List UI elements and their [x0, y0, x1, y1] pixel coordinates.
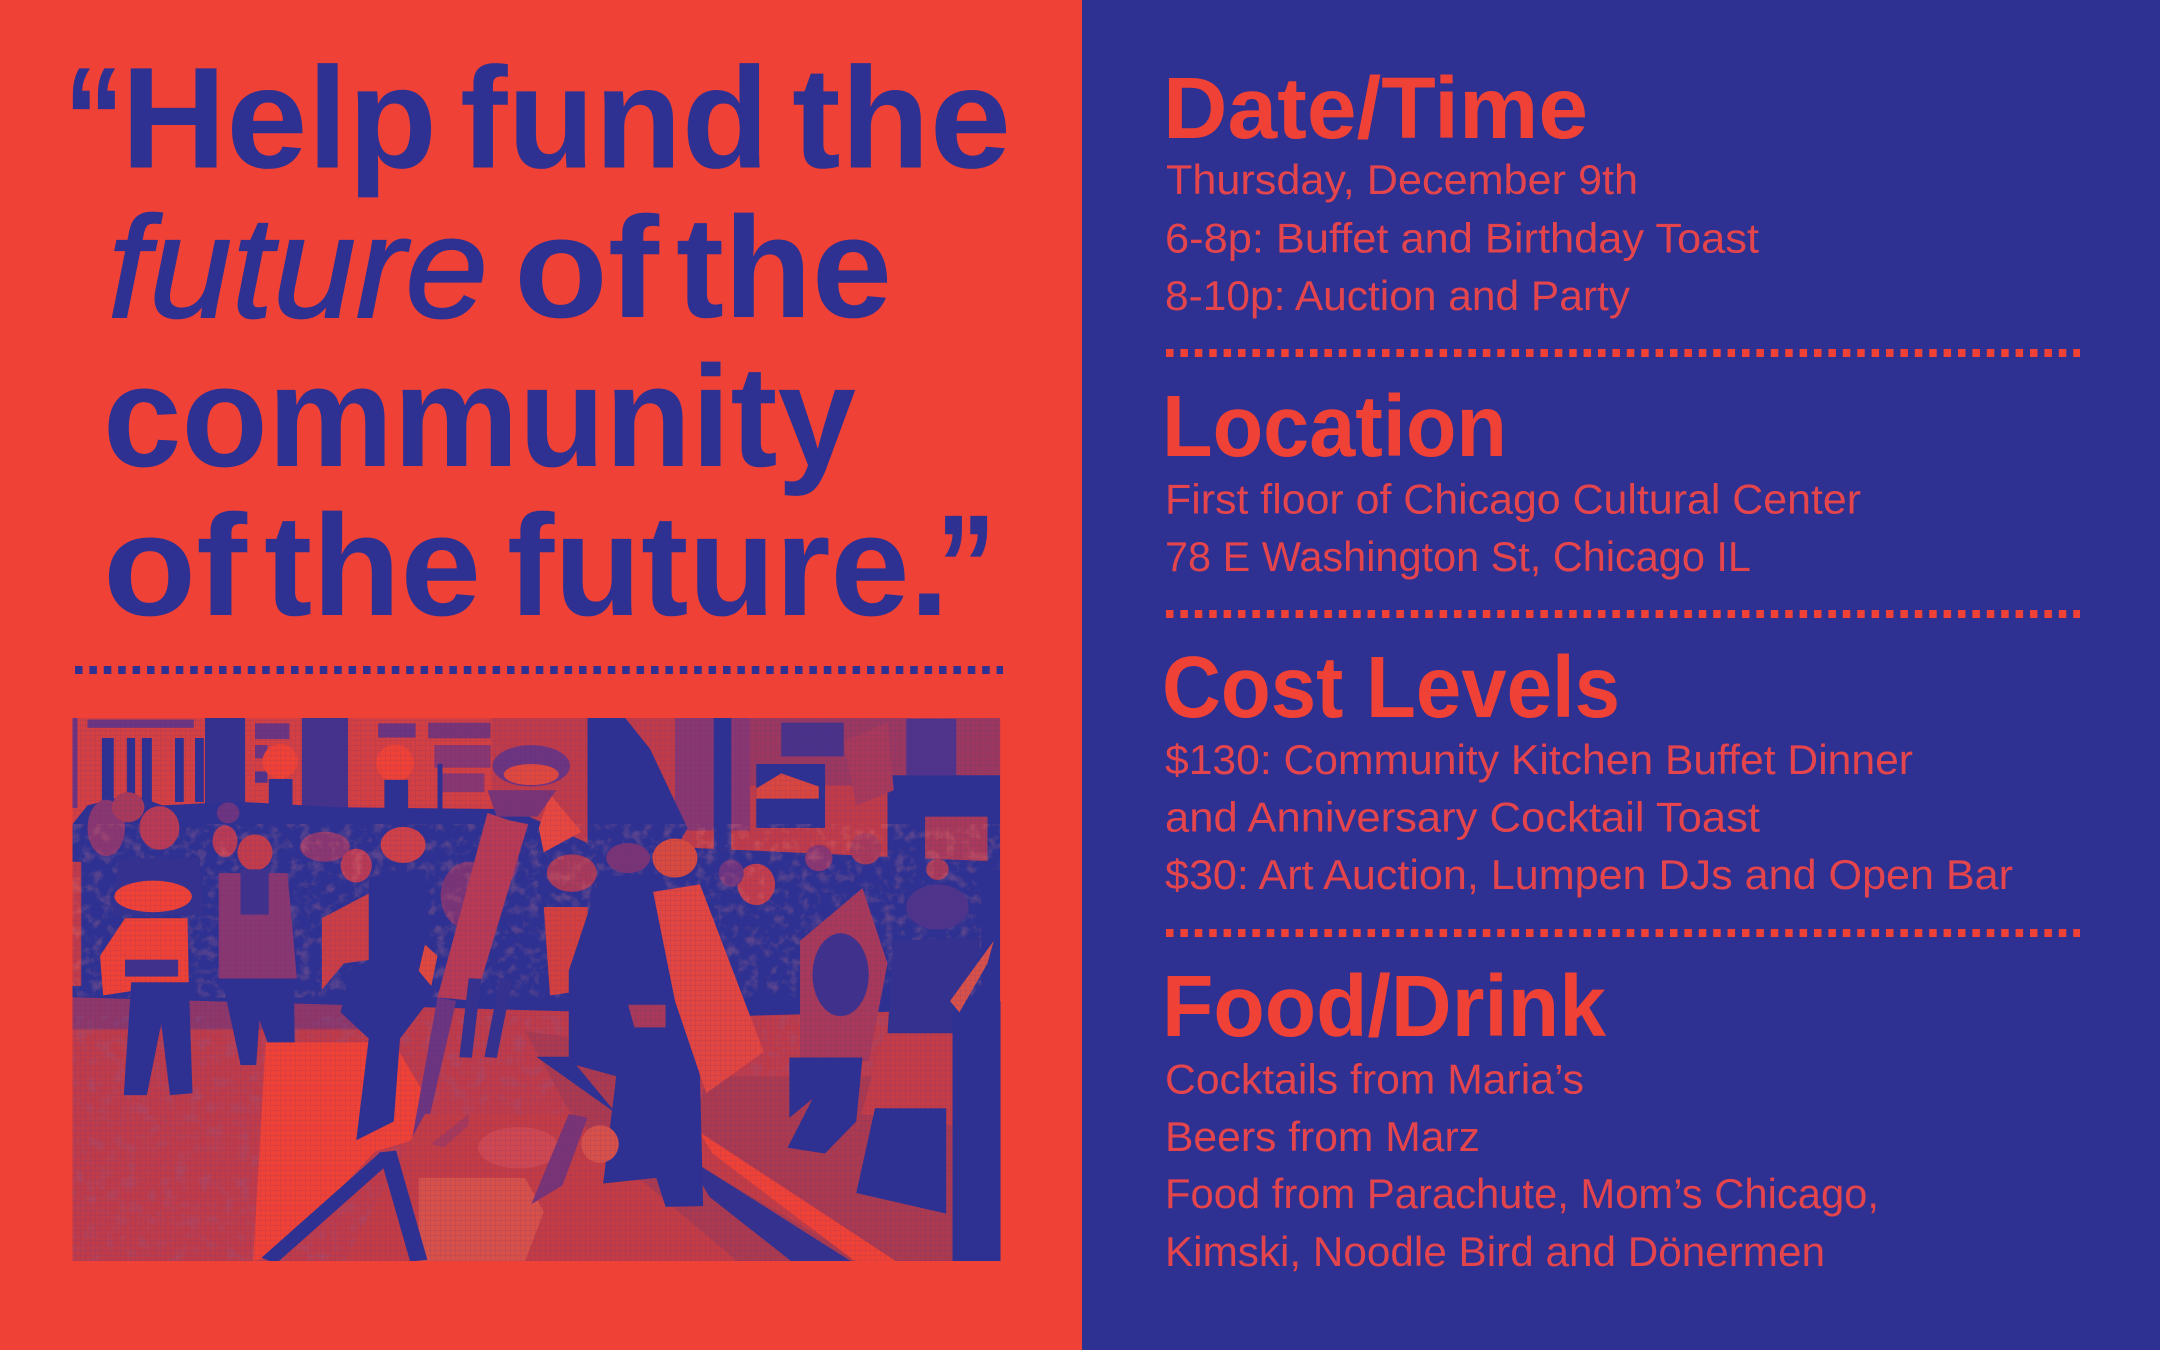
headline quote: fund: [460, 38, 769, 198]
headline quote: of: [514, 187, 660, 348]
section: food and drink: Cocktails from Maria’s: [1165, 1056, 1584, 1102]
section: cost levels: and Anniversary Cocktail Toast: [1165, 794, 1760, 840]
section: date and time: Date/Time: [1163, 60, 1588, 157]
section: date and time: 8-10p: Auction and Party: [1165, 272, 1630, 319]
headline quote: of: [103, 485, 248, 646]
section: cost levels: $30: Art Auction, Lumpen DJs and Open Bar: [1165, 851, 2013, 898]
section: cost levels: $130: Community Kitchen Buffet Dinner: [1165, 736, 1913, 783]
section: location: Location: [1162, 378, 1507, 475]
section: date and time: [1163, 60, 1759, 319]
headline quote: the: [792, 38, 1011, 198]
headline quote: community: [103, 336, 856, 497]
section: location: First floor of Chicago Cultural Center: [1165, 476, 1861, 522]
section: food and drink: Kimski, Noodle Bird and Dönermen: [1165, 1228, 1825, 1275]
panel: red left background: [0, 0, 1082, 1350]
headline quote: the: [264, 485, 481, 646]
section: food and drink: Beers from Marz: [1165, 1113, 1480, 1160]
headline quote: future: [108, 187, 488, 348]
section: cost levels: [1162, 639, 2013, 898]
section: location: 78 E Washington St, Chicago IL: [1165, 533, 1751, 580]
section: location: [1162, 378, 1861, 580]
section: food and drink: Food/Drink: [1162, 958, 1607, 1055]
headline quote: “: [64, 38, 124, 198]
section: food and drink: Food from Parachute, Mom’s Chicago,: [1165, 1170, 1879, 1217]
section: food and drink: [1162, 958, 1879, 1275]
headline quote: future.: [507, 485, 949, 646]
section: date and time: 6-8p: Buffet and Birthday Toast: [1165, 214, 1759, 262]
headline quote: the: [676, 187, 892, 348]
headline quote: ”: [936, 485, 996, 646]
panel: blue right background: [1082, 0, 2160, 1350]
section: date and time: Thursday, December 9th: [1166, 156, 1638, 203]
headline quote: Help: [121, 38, 437, 198]
photo: duotone street parade crowd: [72, 718, 1002, 1262]
headline quote: [64, 38, 1011, 646]
section: cost levels: Cost Levels: [1162, 639, 1620, 736]
